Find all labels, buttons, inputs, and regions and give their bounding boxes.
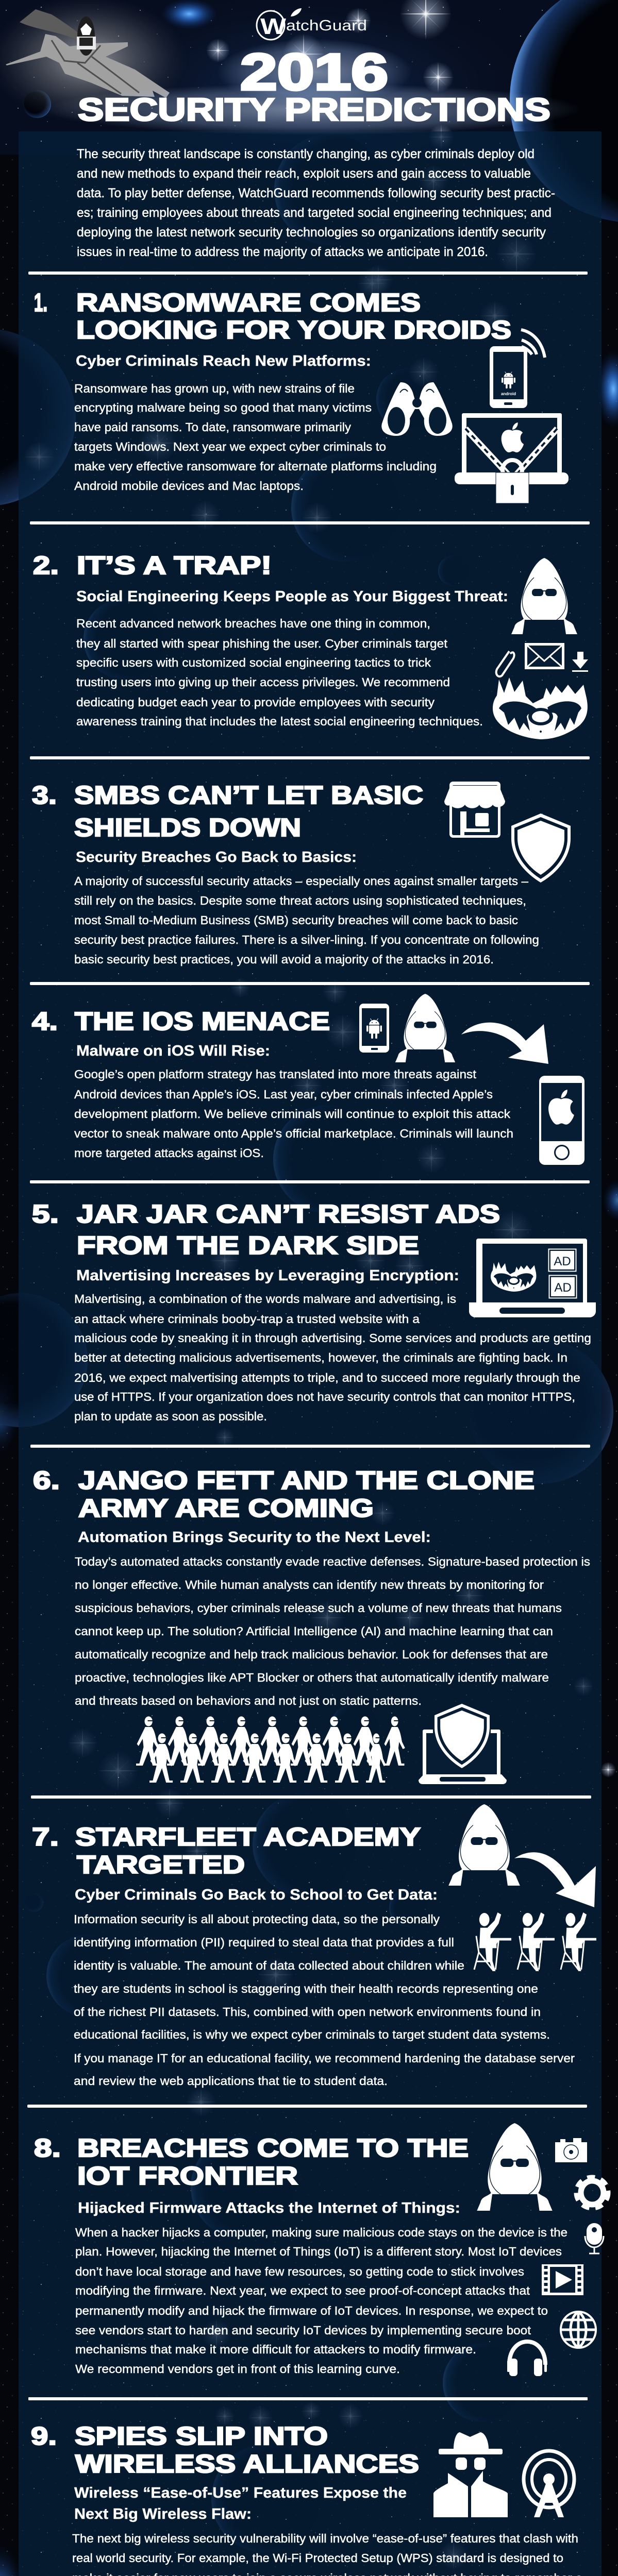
icon: film strip with play <box>542 2264 583 2295</box>
icon: laptop with malicious ads: AD <box>554 1281 572 1295</box>
body text 6: proactive, technologies like APT Blocker or others that automatically identify malware <box>75 1671 549 1684</box>
body text 8: see vendors start to harden and security IoT devices by implementing secure boot <box>75 2324 531 2337</box>
heading 1: 1. <box>34 289 47 317</box>
body text 1: Ransomware has grown up, with new strains of file <box>74 382 355 395</box>
intro text: es; training employees about threats and targeted social engineering techniques; and <box>77 206 552 220</box>
body text 7: educational facilities, is why we expect cyber criminals to target student data systems. <box>74 2028 550 2041</box>
body text 1: Android mobile devices and Mac laptops. <box>74 479 304 493</box>
intro text: and new methods to expand their reach, exploit users and gain access to valuable <box>77 166 531 181</box>
heading 5: 5. <box>32 1200 59 1228</box>
subheading 3: Security Breaches Go Back to Basics: <box>76 849 357 866</box>
arrow: attack swoosh <box>461 1023 548 1064</box>
body text 5: plan to update as soon as possible. <box>74 1410 267 1423</box>
body text 5: better at detecting malicious advertisements, however, the criminals are fighting back. In <box>74 1351 567 1364</box>
body text 1 <box>74 382 437 493</box>
panel: prediction 9 <box>31 2422 592 2576</box>
logo: WatchGuard header: atchGuard <box>286 18 367 34</box>
body text 6: suspicious behaviors, cyber criminals release such a volume of new threats that humans <box>75 1601 562 1615</box>
body text 3: security best practice failures. There is a silver-lining. If you concentrate on following <box>74 933 539 946</box>
title: 2016 <box>240 43 388 101</box>
panel: prediction 8 <box>34 2123 607 2376</box>
intro text: issues in real-time to address the majority of attacks we anticipate in 2016. <box>77 245 488 259</box>
panel: prediction 4 <box>32 994 584 1165</box>
icon: hacker <box>448 1804 520 1886</box>
icon: laptop with malicious ads <box>469 1239 596 1317</box>
heading 4: 4. <box>32 1008 58 1036</box>
body text 8: We recommend vendors get in front of this learning curve. <box>75 2362 400 2376</box>
icon: microphone <box>585 2223 604 2253</box>
body text 9: real world security. For example, the Wi-Fi Protected Setup (WPS) standard is designed to <box>72 2551 563 2565</box>
body text 6 <box>75 1555 590 1707</box>
heading 8: BREACHES COME TO THE <box>77 2134 469 2162</box>
panel: prediction 5 <box>32 1200 596 1423</box>
heading 7 <box>32 1823 421 1879</box>
icon: hacker <box>511 558 577 634</box>
heading 3: SHIELDS DOWN <box>74 814 301 842</box>
body text 7: identity is valuable. The amount of data collected about children while <box>74 1959 464 1972</box>
intro text <box>77 147 555 259</box>
heading 8 <box>34 2134 469 2190</box>
body text 2: specific users with customized social engineering tactics to trick <box>76 656 431 669</box>
body text 4: Google’s open platform strategy has translated into more threats against <box>74 1067 477 1081</box>
icon: gear <box>577 2178 607 2207</box>
heading 6: ARMY ARE COMING <box>78 1495 374 1522</box>
body text 9 <box>72 2532 592 2576</box>
icon: storefront <box>444 782 505 838</box>
icon: spy in hat <box>433 2432 508 2517</box>
body text 6: automatically recognize and help track malicious behavior. Look for defenses that are <box>75 1648 548 1661</box>
panel: prediction 7 <box>32 1804 596 2088</box>
icon: globe <box>561 2312 596 2348</box>
body text 3: most Small to-Medium Business (SMB) security breaches will come back to basic <box>74 913 518 927</box>
body text 5: 2016, we expect malvertising attempts to triple, and to succeed more regularly through the <box>74 1371 580 1384</box>
body text 6: cannot keep up. The solution? Artificial Intelligence (AI) and machine learning that can <box>75 1624 553 1638</box>
subheading 2: Social Engineering Keeps People as Your Biggest Threat: <box>76 588 508 605</box>
heading 6 <box>33 1467 535 1522</box>
subheading 5: Malvertising Increases by Leveraging Encryption: <box>76 1267 459 1284</box>
subheading 9: Next Big Wireless Flaw: <box>74 2506 252 2522</box>
body text 7 <box>74 1912 575 2088</box>
body text 8: plan. However, hijacking the Internet of Things (IoT) is a different story. Most IoT devices <box>75 2245 562 2258</box>
body text 4: vector to sneak malware onto Apple’s official marketplace. Criminals will launch <box>74 1127 513 1140</box>
heading 8: 8. <box>34 2134 61 2162</box>
subheading 9 <box>74 2485 407 2522</box>
icon: laptop with malicious ads: AD <box>554 1255 571 1268</box>
body text 7: Information security is all about protecting data, so the personally <box>74 1912 440 1926</box>
icon: headphones <box>507 2342 547 2376</box>
body text 8: don’t have local storage and have few resources, so getting code to stick involves <box>75 2265 524 2278</box>
body text 4: more targeted attacks against iOS. <box>74 1146 264 1160</box>
icon: android phone with wifi <box>490 330 545 408</box>
heading 9: 9. <box>31 2422 57 2450</box>
icon: paperclip <box>496 651 514 676</box>
heading 3 <box>32 782 423 842</box>
subheading 8: Hijacked Firmware Attacks the Internet of Things: <box>78 2200 460 2216</box>
heading 5: FROM THE DARK SIDE <box>77 1232 419 1260</box>
heading 7: TARGETED <box>77 1851 245 1879</box>
body text 5 <box>74 1292 591 1423</box>
body text 6: Today’s automated attacks constantly evade reactive defenses. Signature-based protection is <box>75 1555 590 1568</box>
panel: prediction 3 <box>32 782 571 966</box>
body text 5: malicious code by sneaking it in through advertising. Some services and products are getting <box>74 1331 591 1345</box>
body text 8: mechanisms that make it more difficult for attackers to modify firmware. <box>75 2343 476 2356</box>
subheading 1: Cyber Criminals Reach New Platforms: <box>76 353 371 369</box>
body text 6: and threats based on behaviors and not just on static patterns. <box>75 1694 422 1707</box>
icon: bear trap <box>493 677 588 739</box>
heading 1: LOOKING FOR YOUR DROIDS <box>76 316 511 344</box>
body text 8: When a hacker hijacks a computer, making sure malicious code stays on the device is the <box>75 2226 567 2239</box>
body text 5: Malvertising, a combination of the words malware and advertising, is <box>74 1292 456 1306</box>
icon: radio tower <box>524 2451 574 2517</box>
body text 3: A majority of successful security attacks – especially ones against smaller targets – <box>74 874 528 888</box>
body text 5: use of HTTPS. If your organization does not have security controls that can monitor HTTPS, <box>74 1390 575 1403</box>
body text 9: The next big wireless security vulnerability will involve “ease-of-use” features that clash with <box>72 2532 578 2545</box>
body text 6: no longer effective. While human analysts can identify new threats by monitoring for <box>75 1578 544 1591</box>
subheading 4: Malware on iOS Will Rise: <box>76 1043 270 1059</box>
icon: download arrow <box>572 652 588 672</box>
body text 1: make very effective ransomware for alternate platforms including <box>74 460 437 473</box>
heading 5 <box>32 1200 500 1260</box>
heading 7: 7. <box>32 1823 59 1851</box>
spaceship illustration <box>0 0 188 124</box>
heading 3: SMBS CAN’T LET BASIC <box>74 782 423 809</box>
body text 7: identifying information (PII) required to steal data that provides a full <box>74 1936 454 1949</box>
icon: camera <box>555 2138 587 2162</box>
body text 3: still rely on the basics. Despite some threat actors using sophisticated techniques, <box>74 894 526 907</box>
panel: prediction 6 <box>33 1467 590 1784</box>
body text 8: permanently modify and hijack the firmware of IoT devices. In response, we expect to <box>75 2304 548 2317</box>
panel: prediction 2 <box>33 552 588 739</box>
icon: hacker <box>477 2123 553 2211</box>
body text 1: have paid ransoms. To date, ransomware primarily <box>74 420 352 434</box>
body text 2: trusting users into giving up their access privileges. We recommend <box>76 675 450 689</box>
body text 4: Android devices than Apple’s iOS. Last year, cyber criminals infected Apple’s <box>74 1088 493 1101</box>
body text 1: targets Windows. Next year we expect cyber criminals to <box>74 440 386 453</box>
heading 6: 6. <box>33 1467 60 1495</box>
subheading 9: Wireless “Ease-of-Use” Features Expose the <box>74 2485 407 2501</box>
heading 9: WIRELESS ALLIANCES <box>75 2450 419 2478</box>
icon: envelope <box>525 643 564 669</box>
icon: android phone with wifi: android <box>501 392 516 396</box>
intro text: data. To play better defense, WatchGuard recommends following security best practic- <box>77 186 555 200</box>
heading 2: 2. <box>33 552 59 580</box>
body text 7: If you manage IT for an educational facility, we recommend hardening the database server <box>74 2052 575 2065</box>
icon: laptop with shield <box>419 1702 507 1784</box>
body text 4: development platform. We believe criminals will continue to exploit this attack <box>74 1107 511 1121</box>
heading 2 <box>33 552 272 580</box>
heading 9 <box>31 2422 419 2478</box>
icon: students at desks <box>474 1912 596 1971</box>
heading 5: JAR JAR CAN’T RESIST ADS <box>77 1200 500 1228</box>
body text 7: and review the web applications that tie to student data. <box>74 2074 388 2088</box>
title: SECURITY PREDICTIONS <box>78 92 550 128</box>
intro text: The security threat landscape is constantly changing, as cyber criminals deploy old <box>77 147 535 161</box>
body text 4 <box>74 1067 513 1160</box>
body text 1: encrypting malware being so good that many victims <box>74 401 372 414</box>
intro text: deploying the latest network security technologies so organizations identify security <box>77 225 546 240</box>
logo: WatchGuard header <box>257 8 367 40</box>
icon: iPhone with apple <box>539 1076 584 1165</box>
icon: clone army <box>136 1717 405 1783</box>
body text 2: Recent advanced network breaches have one thing in common, <box>76 617 430 630</box>
heading 3: 3. <box>32 782 57 809</box>
icon: android phone <box>359 1004 389 1053</box>
body text 2: dedicating budget each year to provide employees with security <box>76 696 435 709</box>
body text 8 <box>75 2226 567 2376</box>
body text 7: of the richest PII datasets. This, combined with open network environments found in <box>74 2005 541 2019</box>
icon: shield <box>511 814 571 883</box>
body text 2 <box>76 617 483 728</box>
panel: prediction 1 <box>34 289 569 503</box>
subheading 6: Automation Brings Security to the Next Level: <box>78 1529 431 1546</box>
body text 2: awareness training that includes the latest social engineering techniques. <box>76 715 483 728</box>
icon: chained Mac laptop <box>455 413 569 503</box>
heading 8: IOT FRONTIER <box>77 2162 298 2190</box>
icon: hacker <box>395 994 455 1062</box>
heading 2: IT’S A TRAP! <box>77 552 272 580</box>
body text 5: an attack where criminals booby-trap a trusted website with a <box>74 1312 420 1326</box>
logo: WatchGuard header: W <box>260 14 287 39</box>
body text 3: basic security best practices, you will avoid a majority of the attacks in 2016. <box>74 953 494 966</box>
subheading 7: Cyber Criminals Go Back to School to Get Data: <box>75 1887 438 1903</box>
title <box>46 39 582 135</box>
body text 7: they are students in school is staggering with their health records representing one <box>74 1982 538 1995</box>
body text 8: modifying the firmware. Next year, we expect to see proof-of-concept attacks that <box>75 2284 530 2297</box>
heading 9: SPIES SLIP INTO <box>75 2422 328 2450</box>
body text 2: they all started with spear phishing the user. Cyber criminals target <box>76 637 448 650</box>
heading 1 <box>34 289 511 344</box>
icon: binoculars <box>381 382 453 436</box>
body text 3 <box>74 874 539 966</box>
heading 1: RANSOMWARE COMES <box>76 289 421 317</box>
arrow: attack swoosh <box>514 1852 596 1907</box>
heading 7: STARFLEET ACADEMY <box>75 1823 421 1851</box>
heading 6: JANGO FETT AND THE CLONE <box>78 1467 535 1495</box>
heading 4: THE IOS MENACE <box>75 1008 330 1036</box>
